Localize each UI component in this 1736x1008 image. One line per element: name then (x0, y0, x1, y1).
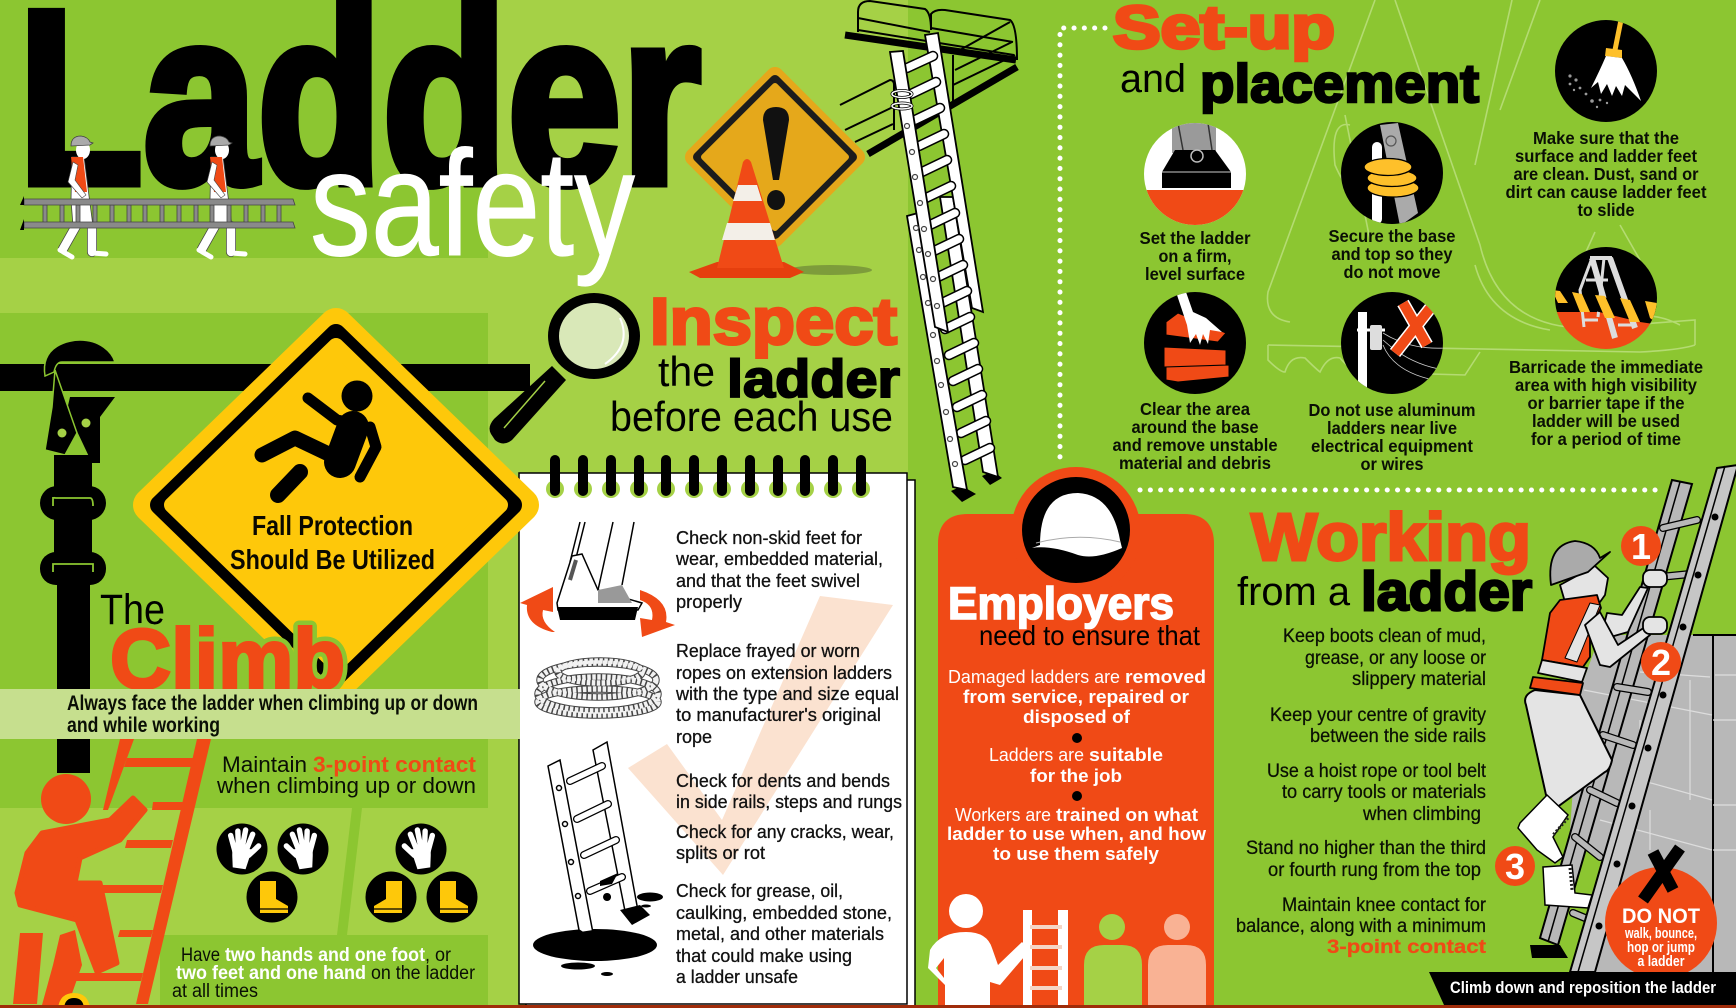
number badges: 1 (1631, 526, 1651, 567)
working text: hoist: Use a hoist rope or tool belt (1267, 760, 1487, 782)
notebook text: ropes: ropes on extension ladders (676, 662, 892, 683)
heading: The: The (100, 586, 165, 634)
notebook text: dents and bends: Check for dents and bends (676, 770, 890, 791)
worker boots (1518, 795, 1568, 863)
text: two hands and one foot: two feet and one hand (176, 963, 366, 984)
spiral binding (546, 455, 870, 498)
do not badge (1605, 848, 1717, 979)
heading: Working from a ladder (1237, 500, 1532, 622)
employers point 1: from service, repaired or (963, 686, 1189, 707)
notebook text: ropes: rope (676, 726, 712, 747)
working text: hoist: to carry tools or materials (1282, 781, 1486, 803)
climber body (17, 798, 145, 972)
ghost boot and ladder outline (1267, 0, 1695, 375)
text: two hands and one foot: , or (425, 945, 452, 966)
yellow diamond sign: fall protection (150, 325, 522, 685)
setup captions: clean surface: to slide (1578, 200, 1635, 220)
setup captions: barricade: ladder will be used (1532, 411, 1680, 431)
working text: boots: grease, or any loose or (1305, 647, 1486, 669)
icon: barricade tape around stepladder (1550, 247, 1660, 352)
ladder rungs (1573, 520, 1697, 920)
working text: rung height: Stand no higher than the third (1246, 837, 1486, 859)
employers point 3: to use them safely (993, 843, 1160, 864)
notebook text: cracks (676, 821, 894, 863)
setup captions: secure base (1328, 226, 1456, 282)
illustration: climber on orange ladder (13, 739, 211, 1008)
text: two hands and one foot: on the ladder (371, 963, 476, 984)
employers point 1: removed (1125, 666, 1206, 687)
text: two hands and one foot: at all times (172, 981, 258, 1002)
brick wall (1570, 635, 1736, 975)
heading: Set-up and placement (1113, 0, 1479, 114)
heading: Working from a ladder: Working (1251, 500, 1531, 575)
worker 1 (60, 136, 106, 257)
working text: knee contact: 3-point contact (1327, 936, 1487, 958)
worker 2 (199, 136, 245, 257)
heading: Inspect the ladder before each use: the (658, 348, 715, 395)
sign text: Fall Protection (252, 510, 413, 541)
notebook text: dents and bends: in side rails, steps and rungs (676, 791, 902, 812)
number badges: 2 (1651, 642, 1671, 683)
heading: Climb: Climb (110, 612, 345, 706)
heading: Inspect the ladder before each use: Inspect (650, 284, 897, 358)
notebook text: non-skid feet: and that the feet swivel (676, 570, 860, 591)
setup captions: secure base: and top so they (1332, 244, 1453, 264)
notebook text: non-skid feet (675, 527, 883, 612)
banner: climb down and reposition (1429, 972, 1736, 1005)
icon: broom sweeping dust (1555, 20, 1657, 122)
base section right rail (940, 197, 998, 477)
working text: boots (1283, 625, 1486, 690)
worker legs (1525, 690, 1612, 808)
notebook text: ropes: to manufacturer's original (676, 704, 881, 725)
ladder rungs (73, 758, 197, 981)
illustration: worker climbing ladder against wall (1518, 465, 1736, 975)
check mark watermark (628, 596, 893, 875)
employers point 3: Workers are (955, 804, 1051, 825)
small warning arc (58, 993, 90, 1008)
heading: Climb: Climb (110, 612, 345, 706)
text: maintain 3-point contact: 3-point contact (313, 752, 477, 777)
icon: coiled rope (538, 661, 658, 715)
working text: gravity (1270, 704, 1486, 747)
warning sign with exclamation mark (694, 76, 856, 238)
icon: clearing bricks (1144, 292, 1246, 394)
working text: hoist (1267, 760, 1487, 825)
employers point 3: ladder to use when, and how (947, 823, 1207, 844)
employers point 3: trained on what (1056, 804, 1198, 825)
dotted divider line (1060, 28, 1662, 490)
working text: boots: slippery material (1352, 668, 1486, 690)
notebook text: cracks: Check for any cracks, wear, (676, 821, 894, 842)
setup captions: secure base: do not move (1344, 262, 1441, 282)
icon: falling person (262, 380, 376, 495)
do not badge: DO NOT (1622, 904, 1700, 928)
notebook text: ropes (675, 640, 899, 747)
setup captions: clear area: and remove unstable (1112, 435, 1278, 455)
notebook text: grease: that could make using (676, 945, 852, 966)
heading: Working from a ladder: ladder (1361, 560, 1532, 622)
setup captions: clean surface: dirt can cause ladder feet (1506, 182, 1707, 202)
panel: employers (928, 467, 1214, 1008)
do not badge: a ladder (1638, 954, 1685, 970)
employers point 1: Damaged ladders are (948, 666, 1120, 687)
platform railings (840, 1, 1017, 142)
fly section right rail (925, 33, 983, 312)
heading: Inspect the ladder before each use: before each use (610, 393, 893, 440)
setup captions: aluminum: Do not use aluminum (1308, 400, 1476, 420)
employers point 1 (948, 666, 1206, 727)
setup captions: barricade: or barrier tape if the (1528, 393, 1685, 413)
notebook text: grease (676, 880, 892, 987)
panel: inspection notebook (519, 455, 915, 1008)
setup captions: clean surface: Make sure that the (1533, 128, 1679, 148)
setup captions: aluminum: electrical equipment (1311, 436, 1473, 456)
setup captions: clean surface (1506, 128, 1707, 220)
yellow diamond sign: fall protection: Should Be Utilized (230, 544, 435, 575)
ladder rails (13, 739, 211, 1004)
employers point 1: disposed of (1023, 706, 1131, 727)
ladder rungs (907, 56, 990, 460)
notebook text: ropes: Replace frayed or worn (676, 640, 860, 661)
working text: rung height (1246, 837, 1486, 881)
setup captions: clean surface: surface and ladder feet (1515, 146, 1697, 166)
worker torso and arms (1530, 541, 1667, 695)
setup captions: aluminum: ladders near live (1327, 418, 1457, 438)
working text: rung height: or fourth rung from the top (1268, 859, 1481, 881)
working text: boots: Keep boots clean of mud, (1283, 625, 1486, 647)
employers point 2: for the job (1030, 765, 1122, 786)
employers point 2: Ladders are (989, 744, 1084, 765)
text: two hands and one foot: Have (181, 945, 220, 966)
icon: ladder foot with arrows (520, 522, 675, 637)
setup captions: firm surface: on a firm, (1158, 246, 1232, 266)
icons: two hands and one foot (216, 824, 328, 922)
working text: hoist: when climbing (1362, 803, 1481, 825)
text: maintain 3-point contact (216, 752, 477, 798)
employers point 2 (989, 744, 1163, 786)
notebook text: grease: a ladder unsafe (676, 966, 798, 987)
employers point 2: suitable (1089, 744, 1163, 765)
do not badge: hop or jump (1627, 940, 1695, 956)
icon: supervisor with ladder (928, 894, 1068, 1008)
bullet (1072, 733, 1082, 743)
heading: Set-up and placement: placement (1200, 54, 1479, 114)
setup captions: firm surface: Set the ladder (1140, 228, 1251, 248)
setup captions: clear area: around the base (1132, 417, 1259, 437)
working text: gravity: Keep your centre of gravity (1270, 704, 1486, 726)
ladder back rail (1540, 480, 1692, 945)
setup captions: clear area: material and debris (1119, 453, 1271, 473)
do not badge: walk, bounce, (1624, 926, 1697, 942)
setup captions: barricade: for a period of time (1531, 429, 1681, 449)
setup captions: clear area: Clear the area (1140, 399, 1250, 419)
fly section left rail (890, 51, 948, 332)
icon: green worker (1084, 914, 1142, 1008)
ladder feet (951, 486, 976, 502)
text: two hands and one foot: two hands and one foot (225, 945, 426, 966)
setup captions: clear area (1112, 399, 1278, 473)
heading: Working from a ladder: from a (1237, 570, 1351, 614)
top ladder with platform (840, 1, 1017, 502)
employers heading: Employers (948, 578, 1174, 629)
carried ladder (24, 199, 295, 228)
icon: ladder with oil spill (533, 742, 663, 976)
band: always face the ladder (0, 689, 520, 739)
setup captions: firm surface: level surface (1145, 264, 1245, 284)
notebook text: ropes: with the type and size equal (675, 683, 899, 704)
text: maintain 3-point contact: Maintain (222, 752, 307, 777)
magnifying glass (490, 293, 640, 444)
bottom edge stripe (0, 1005, 1736, 1008)
front page (519, 473, 907, 1004)
notebook text: non-skid feet: wear, embedded material, (675, 548, 883, 569)
setup captions: aluminum: or wires (1360, 454, 1424, 474)
icon: rope securing ladder (1341, 122, 1443, 226)
working text: knee contact: Maintain knee contact for (1282, 894, 1486, 916)
notebook text: dents and bends (676, 770, 902, 812)
climber head (41, 774, 91, 824)
heading: Inspect the ladder before each use (610, 284, 900, 440)
notebook text: cracks: splits or rot (676, 842, 765, 863)
working text: knee contact (1236, 894, 1487, 958)
title: safety: safety (310, 119, 635, 287)
working text: gravity: between the side rails (1310, 725, 1486, 747)
fall protection hook and pipe (0, 340, 530, 773)
bullet (1072, 791, 1082, 801)
icons: two feet and one hand (366, 824, 478, 922)
base section left rail (907, 213, 967, 490)
heading: Inspect the ladder before each use: ladder (727, 350, 900, 409)
back page (526, 480, 915, 1008)
icon: ladder on firm surface (1144, 123, 1246, 226)
notebook text: grease: Check for grease, oil, (676, 880, 843, 901)
icon: pink worker (1148, 914, 1206, 1008)
band: always face the ladder: Always face the ladder when climbing up or down (67, 692, 478, 715)
setup captions: clean surface: are clean. Dust, sand or (1514, 164, 1699, 184)
setup captions: aluminum (1308, 400, 1476, 474)
setup captions: firm surface (1140, 228, 1251, 284)
employers point 3 (947, 804, 1207, 864)
illustration: two workers carrying a ladder (20, 136, 295, 257)
traffic cone (689, 159, 872, 278)
notebook text: non-skid feet: Check non-skid feet for (676, 527, 862, 548)
heading: Set-up and placement: and (1120, 57, 1186, 101)
icon: no aluminum near wires (1341, 292, 1445, 394)
setup captions: barricade: Barricade the immediate (1509, 357, 1703, 377)
notebook text: grease: metal, and other materials (676, 923, 884, 944)
setup captions: secure base: Secure the base (1328, 226, 1456, 246)
text: maintain 3-point contact: when climbing up or down (216, 773, 476, 798)
band: always face the ladder: and while working (67, 714, 220, 737)
notebook text: grease: caulking, embedded stone, (676, 902, 892, 923)
setup captions: barricade: area with high visibility (1515, 375, 1697, 395)
text: two hands and one foot (172, 945, 476, 1002)
setup captions: barricade (1509, 357, 1703, 449)
ladder front rail (1570, 465, 1736, 972)
number badges (1495, 526, 1681, 887)
icon: hard hat (1022, 477, 1130, 583)
working text: knee contact: balance, along with a minimum (1236, 915, 1486, 937)
notebook text: non-skid feet: properly (676, 591, 743, 612)
number badges: 3 (1505, 846, 1525, 887)
employers sub-heading: need to ensure that (979, 620, 1200, 651)
